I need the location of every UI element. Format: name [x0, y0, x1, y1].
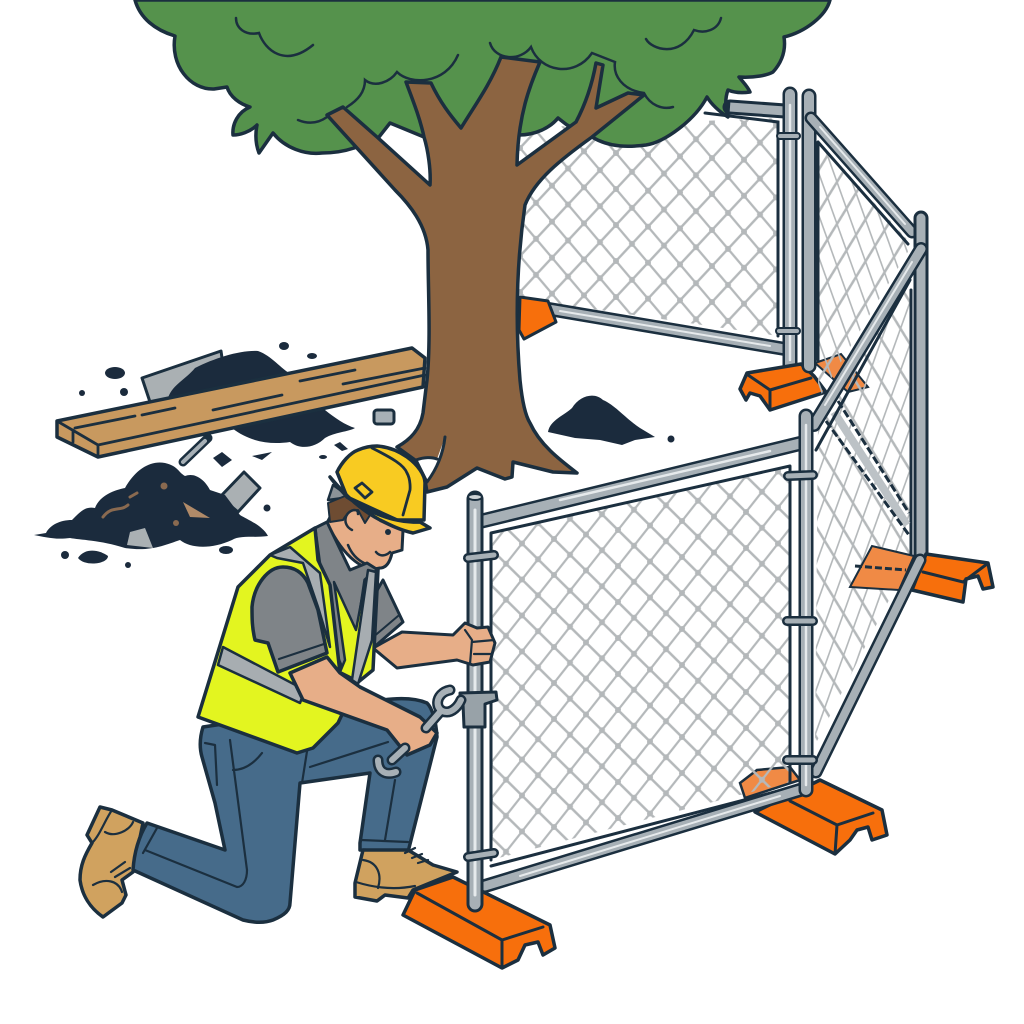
front boot	[355, 850, 457, 901]
ear	[345, 510, 358, 530]
side fence: second post and mesh	[809, 96, 921, 745]
hi-vis vest	[198, 528, 378, 753]
inner frame	[491, 466, 790, 866]
far sleeve	[360, 580, 403, 648]
eye and smile	[348, 545, 390, 563]
wood plank	[57, 348, 425, 457]
rubble pile front	[34, 462, 270, 568]
jeans	[133, 699, 437, 922]
helmet brim	[330, 477, 430, 533]
face	[327, 498, 403, 569]
rear fence panel mesh	[517, 113, 778, 336]
right post	[787, 416, 813, 790]
bottom pipe	[485, 790, 800, 886]
tree trunk	[327, 57, 644, 492]
waist reflective band	[218, 647, 305, 703]
headband	[328, 485, 350, 500]
rubble pile right of tree	[548, 396, 674, 445]
hair	[328, 496, 372, 523]
near arm	[290, 657, 437, 755]
shirt collar and chest	[315, 522, 378, 690]
wrench	[378, 690, 461, 773]
left reflective strap	[270, 547, 330, 647]
jeans seams	[143, 740, 408, 887]
top pipe	[482, 443, 802, 521]
side fence: diagonal upper pipe	[814, 249, 921, 450]
orange foot: front right	[740, 767, 887, 854]
front fence panel	[482, 416, 813, 886]
rear fence panel pipes	[525, 94, 797, 366]
far arm	[373, 623, 495, 668]
rubble pile behind plank	[79, 342, 394, 467]
rear boot	[80, 807, 143, 917]
right reflective strap	[352, 570, 376, 684]
vest chest panels	[334, 582, 365, 680]
helmet ridge and clip	[355, 448, 410, 515]
clamp	[460, 692, 497, 727]
front left post	[460, 494, 497, 904]
side fence: far pipe seen through mesh	[826, 401, 909, 535]
orange foot: right	[850, 546, 993, 602]
canopy contour lines	[236, 18, 721, 123]
orange foot: front left	[403, 877, 555, 968]
helmet dome	[337, 446, 425, 520]
orange foot: rear left	[519, 297, 556, 339]
tree root white gap and line	[416, 437, 445, 482]
tree canopy	[135, 0, 830, 153]
side fence: bottom pipe	[816, 560, 920, 772]
worker	[80, 446, 495, 922]
mesh	[491, 466, 790, 860]
near sleeve	[252, 567, 327, 672]
orange foot: rear centre	[740, 354, 868, 410]
